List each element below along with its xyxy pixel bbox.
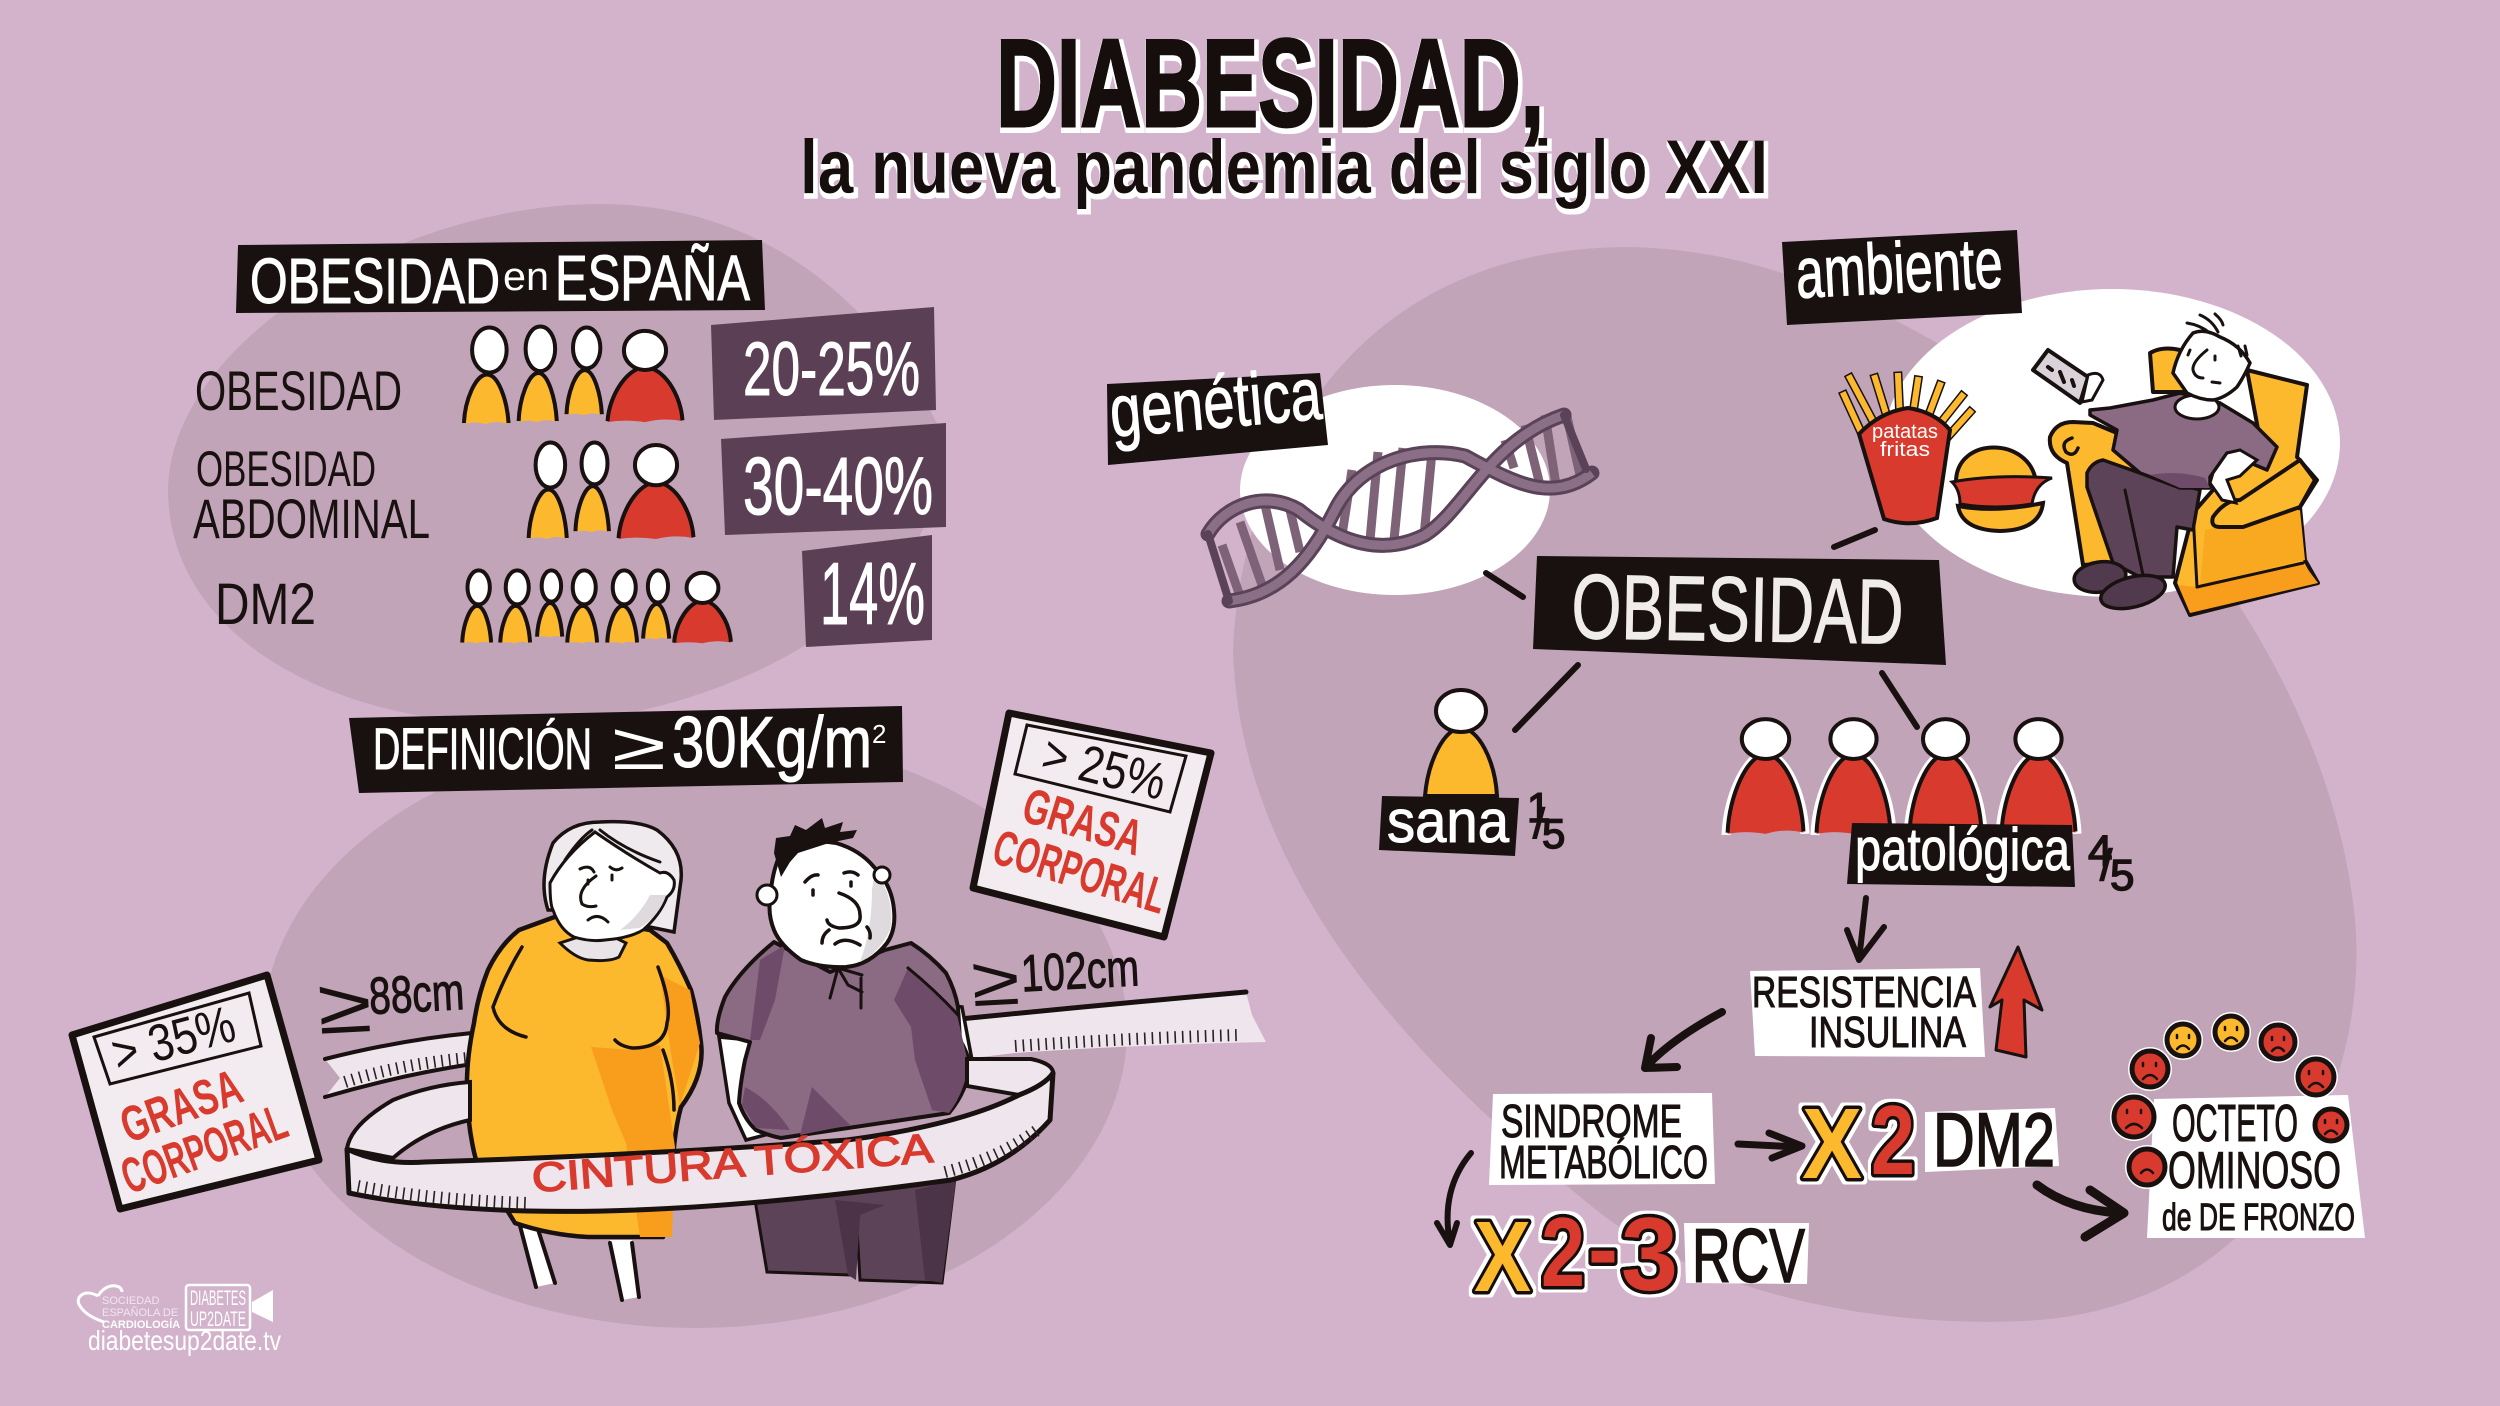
shirt shading bbox=[742, 945, 968, 1135]
icon: DNA helix bbox=[1208, 412, 1592, 601]
remote bbox=[2033, 350, 2088, 403]
resistencia insulina bbox=[1750, 968, 1985, 1057]
logos bbox=[78, 1285, 281, 1356]
definition box bbox=[349, 703, 903, 793]
subtitle: la nueva pandemia del siglo XXI bbox=[800, 125, 1768, 210]
sana label bbox=[1379, 796, 1519, 856]
row: DM2: DM2 bbox=[215, 572, 316, 637]
scale card >35%: > 35% bbox=[106, 995, 241, 1084]
icon: healthy person bbox=[1425, 690, 1497, 796]
row: obesidad abdominal bbox=[193, 423, 946, 550]
logo: Sociedad Española de Cardiología: SOCIEDAD bbox=[102, 1295, 160, 1307]
definition box: ≥ bbox=[612, 709, 666, 783]
patológica group: patológica bbox=[1855, 816, 2070, 883]
row: obesidad bbox=[195, 307, 936, 424]
label ≥102cm: 102cm bbox=[1020, 939, 1141, 1003]
x2-3 RCV: 3 bbox=[1621, 1197, 1678, 1313]
sana group bbox=[1379, 690, 1565, 857]
arms bbox=[719, 1005, 972, 1140]
hand with remote bbox=[2082, 373, 2103, 402]
white spot bbox=[1884, 289, 2340, 597]
central obesidad box: OBESIDAD bbox=[1571, 556, 1904, 664]
main heading: DIABESIDAD, bbox=[996, 15, 1544, 153]
armchair left arm bbox=[2050, 422, 2140, 565]
scale card >25% bbox=[973, 713, 1211, 937]
x2-3 RCV: 2 bbox=[1541, 1197, 1585, 1307]
patológica label bbox=[1847, 823, 2075, 887]
genética label bbox=[1107, 373, 1328, 465]
ambiente label bbox=[1782, 230, 2022, 325]
logo: Sociedad Española de Cardiología bbox=[78, 1286, 180, 1331]
label ≥88cm: 88cm bbox=[368, 963, 466, 1026]
man bbox=[717, 818, 972, 1283]
fraction 1/5: 1 bbox=[1527, 784, 1550, 831]
panel background blob bbox=[1233, 247, 2356, 1322]
panel background blob bbox=[168, 204, 945, 725]
genética bbox=[1106, 352, 1592, 601]
row: obesidad: OBESIDAD bbox=[195, 359, 402, 422]
icon: fries: fritas bbox=[1880, 439, 1930, 461]
hair bbox=[544, 822, 681, 932]
facial features bbox=[565, 830, 660, 922]
x2-3 RCV bbox=[1474, 1193, 1809, 1313]
arrow to síndrome bbox=[1645, 1012, 1722, 1068]
label ≥88cm: ≥ bbox=[315, 960, 374, 1051]
website: diabetesup2date.tv bbox=[88, 1325, 281, 1356]
x2-3 RCV: RCV bbox=[1692, 1214, 1805, 1299]
arrow to rcv bbox=[1437, 1153, 1471, 1245]
panel: definición bbox=[72, 703, 1266, 1328]
woman bbox=[467, 822, 702, 1300]
trousers bbox=[750, 1170, 956, 1283]
ambiente bbox=[1782, 223, 2340, 615]
x2 DM2: DM2 bbox=[1933, 1098, 2055, 1183]
sana group: sana bbox=[1387, 788, 1510, 855]
fraction 4/5: / bbox=[2100, 841, 2113, 890]
shoes bbox=[2072, 559, 2128, 595]
síndrome metabólico: METABÓLICO bbox=[1499, 1136, 1708, 1188]
neck bbox=[2175, 395, 2219, 419]
title bbox=[800, 15, 1768, 210]
scale card >25%: GRASA bbox=[1016, 777, 1149, 866]
octeto ominoso: OMINOSO bbox=[2168, 1142, 2341, 1200]
heading box: OBESIDAD bbox=[250, 245, 500, 317]
icons: four sick persons bbox=[1726, 719, 2077, 835]
dress bbox=[467, 915, 702, 1237]
arrow to x2 bbox=[1738, 1133, 1802, 1158]
octeto ominoso: de DE FRONZO bbox=[2162, 1197, 2355, 1239]
row: obesidad: 20-25% bbox=[743, 327, 920, 412]
arrow down bbox=[1847, 898, 1884, 960]
shirt bbox=[717, 942, 970, 1138]
tape strip right bbox=[960, 992, 1266, 1059]
head bbox=[770, 842, 894, 967]
collar bbox=[560, 930, 626, 961]
hand on armchair bbox=[2210, 450, 2257, 503]
panel: obesidad en España bbox=[168, 204, 946, 725]
hair bbox=[774, 818, 857, 877]
tape strip left bbox=[325, 1033, 472, 1097]
facial features bbox=[805, 872, 870, 945]
arrow to octeto bbox=[2037, 1185, 2124, 1237]
row: DM2: 14% bbox=[820, 544, 925, 643]
logo: Diabetes Up2Date: DIABETES bbox=[190, 1287, 246, 1310]
resistencia insulina: INSULINA bbox=[1809, 1008, 1966, 1057]
x2 DM2: 2 bbox=[1871, 1085, 1915, 1195]
face bbox=[550, 832, 674, 941]
scale card >35%: GRASA bbox=[113, 1058, 249, 1154]
patológica group bbox=[1726, 719, 2134, 900]
legs bbox=[519, 1220, 639, 1300]
x2 DM2 bbox=[1802, 1085, 2059, 1200]
armchair back and body bbox=[2150, 349, 2318, 615]
dress shading bbox=[591, 975, 700, 1237]
row: obesidad abdominal: OBESIDAD bbox=[196, 441, 376, 497]
resistencia insulina: RESISTENCIA bbox=[1752, 968, 1976, 1017]
scale card >25%: CORPORAL bbox=[987, 819, 1173, 925]
fraction 4/5: 5 bbox=[2110, 851, 2134, 900]
scale card >35% bbox=[72, 975, 319, 1209]
measuring tape: cintura tóxica bbox=[347, 1059, 1053, 1211]
logo: Diabetes Up2Date: UP2DATE bbox=[190, 1308, 246, 1331]
x2 DM2: X bbox=[1802, 1088, 1862, 1200]
síndrome metabólico bbox=[1489, 1093, 1715, 1188]
icon: fries: patatas bbox=[1872, 421, 1938, 443]
red up arrow bbox=[1990, 947, 2042, 1057]
definition box: 30Kg/m bbox=[672, 703, 872, 783]
face details bbox=[2187, 314, 2247, 383]
icon: fries bbox=[1844, 376, 1970, 523]
row: obesidad abdominal: ABDOMINAL bbox=[193, 487, 430, 550]
icons: eight sad faces bbox=[2110, 1012, 2351, 1189]
definition box: 2 bbox=[872, 719, 886, 749]
label ≥102cm: ≥ bbox=[969, 941, 1021, 1021]
genética: genética bbox=[1106, 352, 1325, 453]
x2-3 RCV: X bbox=[1474, 1201, 1531, 1313]
icon: man in armchair bbox=[2033, 314, 2318, 615]
sweater bbox=[2090, 393, 2277, 488]
síndrome metabólico: SINDROME bbox=[1501, 1095, 1682, 1147]
white spot bbox=[1240, 385, 1550, 595]
fraction 1/5: 5 bbox=[1542, 810, 1565, 857]
fraction 4/5: 4 bbox=[2088, 827, 2112, 876]
connector lines bbox=[1486, 530, 1917, 730]
scale card >35%: CORPORAL bbox=[114, 1093, 295, 1205]
panel background blob bbox=[263, 732, 1127, 1328]
panel: obesidad causes and consequences bbox=[1106, 223, 2365, 1322]
row: DM2 bbox=[215, 535, 932, 647]
row: obesidad abdominal: 30-40% bbox=[743, 441, 933, 532]
logo: Sociedad Española de Cardiología: CARDIOLOGÍA bbox=[102, 1318, 180, 1331]
heading box: ESPAÑA bbox=[555, 242, 750, 314]
definition box: DEFINICIÓN bbox=[373, 717, 592, 782]
label ≥88cm bbox=[315, 955, 467, 1051]
logo: Sociedad Española de Cardiología: ESPAÑOLA DE bbox=[102, 1306, 178, 1319]
fraction 1/5: / bbox=[1533, 800, 1545, 847]
trousers bbox=[2087, 460, 2200, 577]
octeto ominoso bbox=[2110, 1012, 2365, 1239]
label ≥102cm bbox=[969, 934, 1141, 1021]
ambiente: ambiente bbox=[1794, 223, 2005, 314]
octeto ominoso: OCTETO bbox=[2172, 1095, 2298, 1153]
heading box: en bbox=[503, 255, 549, 299]
logo: Diabetes Up2Date bbox=[186, 1285, 273, 1331]
armchair shading and arm bbox=[2200, 510, 2305, 585]
x2-3 RCV: - bbox=[1588, 1193, 1618, 1303]
icon: burger bbox=[1952, 448, 2052, 531]
heading box bbox=[236, 240, 765, 317]
scale card >25%: > 25% bbox=[1036, 725, 1172, 812]
head bbox=[2173, 331, 2250, 400]
tape label: CINTURA TÓXICA bbox=[530, 1125, 935, 1201]
